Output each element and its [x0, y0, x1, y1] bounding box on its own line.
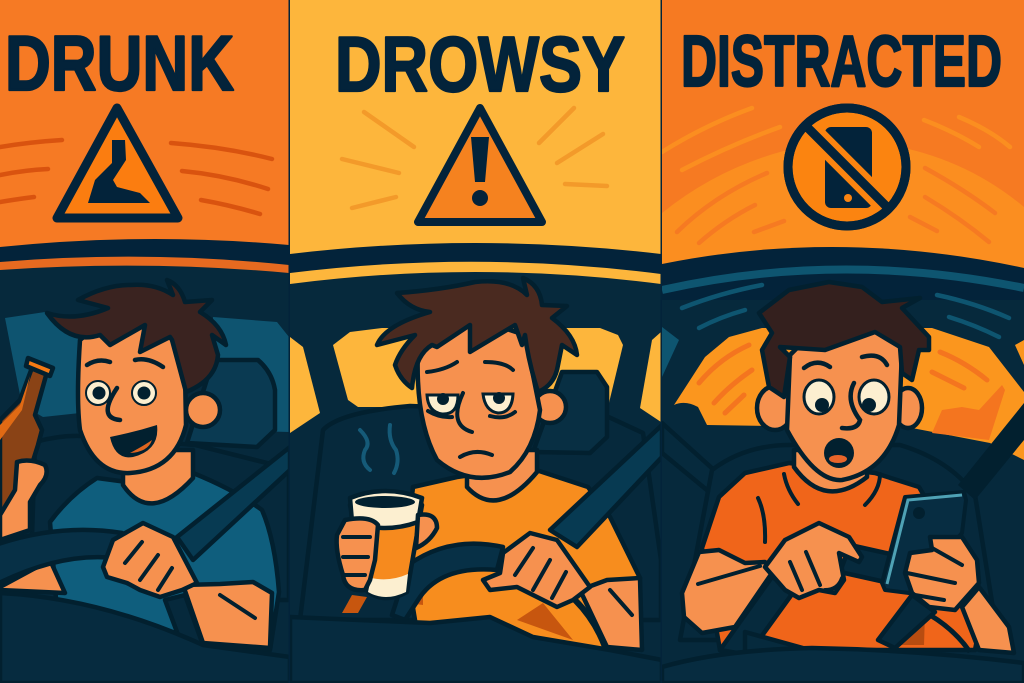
- steering wheel: [392, 544, 503, 620]
- sky background: [662, 0, 1024, 270]
- hair: [759, 282, 929, 397]
- neck: [467, 450, 537, 500]
- dark orange patches: [342, 595, 367, 613]
- hand holding phone: [905, 537, 979, 610]
- seat belt: [177, 447, 290, 560]
- neck: [794, 450, 867, 491]
- sky background: [0, 0, 289, 250]
- left belt strap: [662, 423, 725, 500]
- bottle and hand: [0, 358, 53, 540]
- hand on wheel: [483, 533, 590, 607]
- phone: [882, 492, 966, 593]
- top right window patch: [1015, 340, 1024, 365]
- driver: drunk: [47, 280, 279, 650]
- finger lines: [125, 542, 255, 618]
- right belt strap: [958, 403, 1024, 500]
- finger lines: [515, 548, 632, 615]
- hair: [47, 280, 226, 392]
- windshield band: [290, 243, 660, 258]
- hand on wheel: [103, 523, 197, 597]
- mouth: [110, 425, 157, 457]
- face: [418, 320, 540, 478]
- arm crease: [698, 566, 760, 584]
- seat back: [300, 406, 661, 620]
- tongue: [829, 455, 847, 463]
- car window: [674, 328, 1024, 460]
- car window left: [5, 312, 85, 417]
- hedge shape: [932, 385, 1005, 440]
- heading: DROWSY: DROWSY: [335, 20, 625, 108]
- sleepy eyes: [427, 395, 458, 414]
- wheel right arc: [575, 600, 605, 647]
- collar lines: [758, 474, 880, 542]
- icon: winding road warning sign: [57, 108, 178, 218]
- left arm: [682, 550, 772, 633]
- windshield stripe: [662, 269, 1024, 290]
- icon: no phone sign: [788, 108, 906, 226]
- brows, bags, nose and frown: [427, 362, 515, 457]
- car windows: [333, 328, 623, 407]
- dashboard: [0, 593, 290, 683]
- forearm: [962, 587, 1014, 653]
- headrest: [187, 360, 275, 447]
- hand on wheel: [765, 523, 862, 598]
- right arm: [580, 578, 642, 650]
- brows and nose: [804, 356, 887, 428]
- phone camera: [913, 507, 925, 519]
- driver: distracted: [702, 282, 985, 650]
- driver: drowsy: [377, 278, 640, 650]
- window streaks: [699, 345, 987, 413]
- side window left: [290, 337, 320, 433]
- ear: [186, 393, 220, 427]
- headrest: [533, 372, 607, 453]
- lower shirt patch: [895, 613, 925, 645]
- steering column: [165, 595, 203, 645]
- seat back: [30, 436, 289, 600]
- alert rays: [342, 108, 607, 208]
- shirt: [702, 463, 985, 650]
- steering wheel: [0, 530, 122, 585]
- right arm: [183, 582, 272, 648]
- heading: DRUNK: DRUNK: [5, 19, 234, 107]
- eyes: [804, 380, 834, 414]
- dark orange patch centre: [407, 590, 423, 605]
- tongue: [130, 440, 152, 453]
- ear: [534, 391, 566, 423]
- car window right: [213, 317, 289, 432]
- panel: distracted: [662, 0, 1024, 683]
- brows and nose: [87, 359, 163, 420]
- windshield stripe: [290, 262, 661, 284]
- steering wheel: [720, 545, 970, 660]
- side window right: [640, 332, 661, 422]
- face: [78, 315, 186, 473]
- panel: drunk: [0, 0, 290, 683]
- shirt: [405, 467, 640, 650]
- panel: drowsy: [290, 0, 662, 683]
- neck: [123, 450, 193, 503]
- windshield band: [0, 239, 288, 250]
- motion lines: [0, 140, 272, 214]
- mouth: [824, 438, 854, 468]
- seat back: [680, 445, 998, 640]
- windshield stripe: [0, 257, 289, 273]
- top left blue patch: [662, 327, 679, 377]
- phone edge: [887, 495, 962, 584]
- seat belt: [550, 425, 662, 547]
- sky dome: [662, 140, 1024, 270]
- panel dividers: [288, 0, 662, 683]
- background arcs: [662, 108, 1010, 243]
- face: [787, 320, 902, 480]
- eyes: [86, 381, 110, 405]
- coffee cup and hand: [337, 491, 437, 598]
- lower wheel patch: [517, 603, 573, 640]
- ears: [757, 386, 793, 430]
- dashboard: [290, 617, 662, 683]
- windshield band: [662, 247, 1024, 300]
- icon: exclamation warning sign: [418, 108, 542, 222]
- steam: [360, 425, 398, 473]
- roof lines: [682, 285, 1009, 337]
- finger lines: [790, 552, 842, 590]
- shirt: [50, 473, 279, 650]
- sky background: [290, 0, 661, 258]
- lower arm under wheel: [0, 560, 65, 593]
- dashboard: [662, 648, 1024, 683]
- hair: [377, 278, 577, 392]
- finger lines: [907, 548, 962, 600]
